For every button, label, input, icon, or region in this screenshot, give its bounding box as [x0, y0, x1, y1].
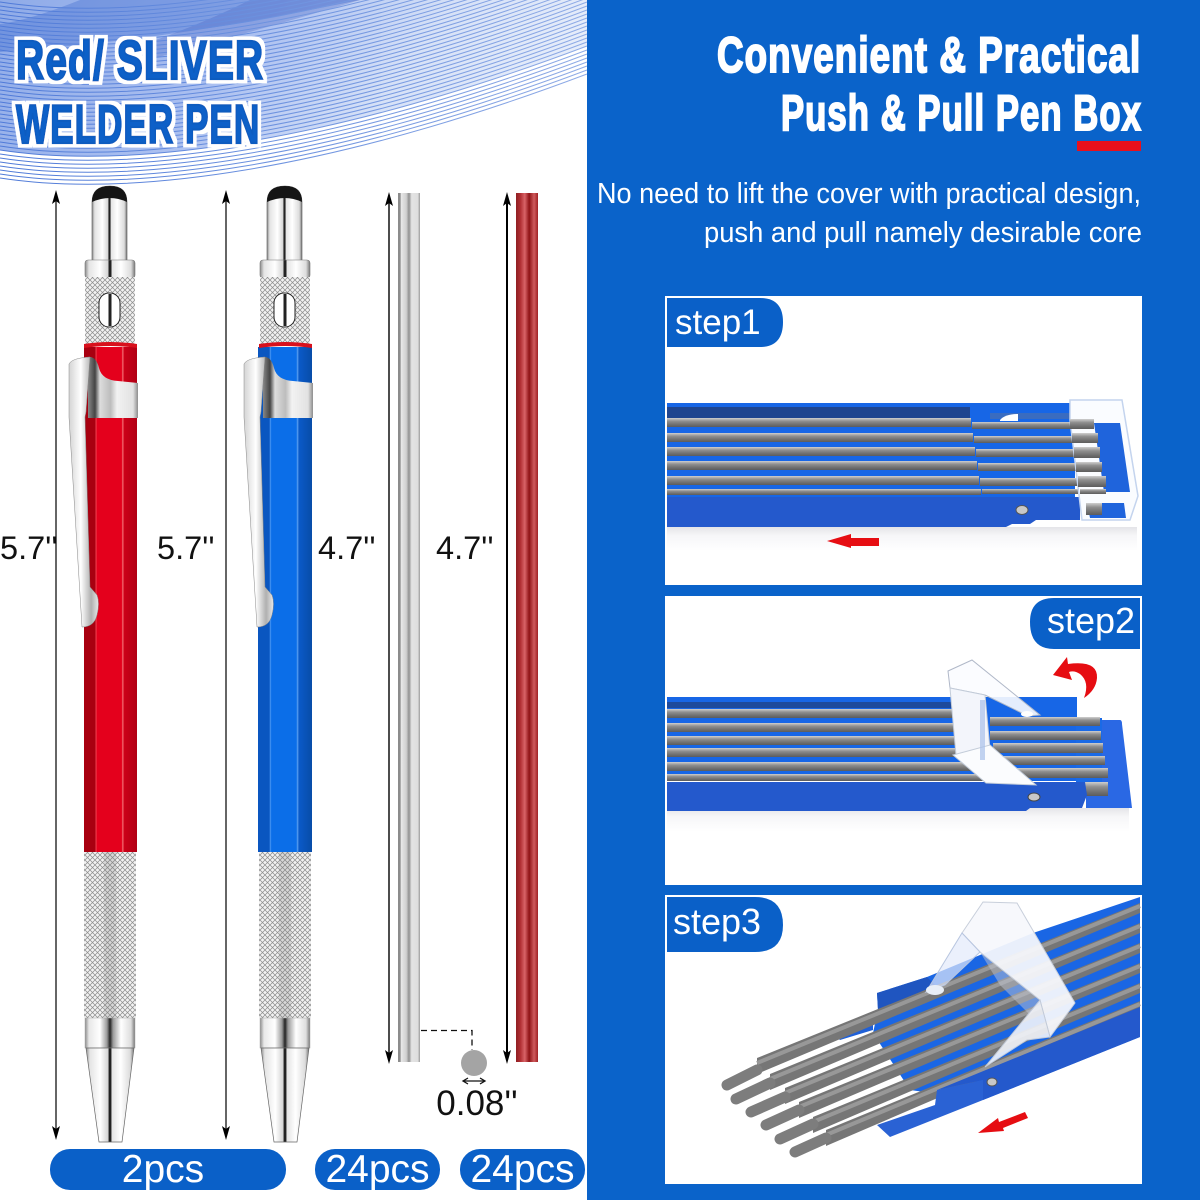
diameter callout: 0.08 inch: 0.08''	[436, 1084, 518, 1123]
quantity pill: 24pcs red: 24pcs	[470, 1148, 575, 1191]
pen box with cover lifting	[667, 660, 1132, 811]
refills	[727, 903, 1140, 1152]
heading: Convenient and Practical Push and Pull Pen Box: Convenient & Practical	[717, 28, 1141, 83]
clear cover	[1070, 400, 1138, 520]
clear cover lifted	[948, 660, 1040, 785]
wave banner background	[0, 0, 587, 184]
dimension arrows	[52, 190, 511, 1140]
description text	[597, 178, 1142, 249]
pen clip	[244, 357, 313, 627]
quantity pill: 2pcs	[50, 1148, 286, 1191]
title: Red/ Sliver Welder Pen	[16, 31, 264, 155]
step 3 panel	[665, 895, 1142, 1184]
panel: push and pull pen box	[587, 0, 1200, 1200]
quantity pill: 24pcs silver: 24pcs	[325, 1148, 430, 1191]
step 2 label: step2	[1047, 600, 1135, 641]
arrow: lift cover	[1053, 657, 1097, 698]
step 3 label	[667, 897, 783, 952]
length labels: 5.7''	[0, 530, 58, 566]
step 1 label: step1	[675, 303, 761, 342]
title: Red/ Sliver Welder Pen: WELDER PEN	[16, 93, 260, 155]
length labels: 5.7''	[157, 530, 215, 566]
heading: Convenient and Practical Push and Pull Pen Box: Push & Pull Pen Box	[781, 86, 1142, 142]
clear cover open	[926, 902, 1075, 1067]
step 1 label	[667, 298, 783, 347]
quantity pill: 2pcs: 2pcs	[122, 1148, 204, 1191]
heading: Convenient and Practical Push and Pull Pen Box	[717, 28, 1142, 142]
diameter callout: 0.08 inch	[421, 1030, 518, 1123]
rod: red refill	[516, 193, 538, 1062]
description text: No need to lift the cover with practical design,	[597, 178, 1141, 210]
description text: push and pull namely desirable core	[704, 217, 1142, 249]
length labels: 4.7''	[436, 530, 494, 566]
length labels	[0, 530, 494, 566]
step 1 panel	[665, 296, 1142, 585]
pen box angled with refills	[727, 897, 1140, 1152]
step 3 label: step3	[673, 901, 761, 942]
pen box closed	[667, 400, 1138, 527]
red underline	[1077, 141, 1141, 151]
pen: blue welder pen	[244, 186, 313, 1142]
pen clip	[69, 357, 138, 627]
rod: silver refill	[398, 193, 420, 1062]
step 2 panel	[665, 596, 1142, 885]
length labels: 4.7''	[318, 530, 376, 566]
step 2 label	[1030, 598, 1140, 649]
arrow: slide left	[827, 534, 879, 548]
title: Red/ Sliver Welder Pen: Red/ SLIVER	[16, 31, 264, 92]
arrow: slide out	[978, 1112, 1028, 1133]
pen: red welder pen	[69, 186, 138, 1142]
